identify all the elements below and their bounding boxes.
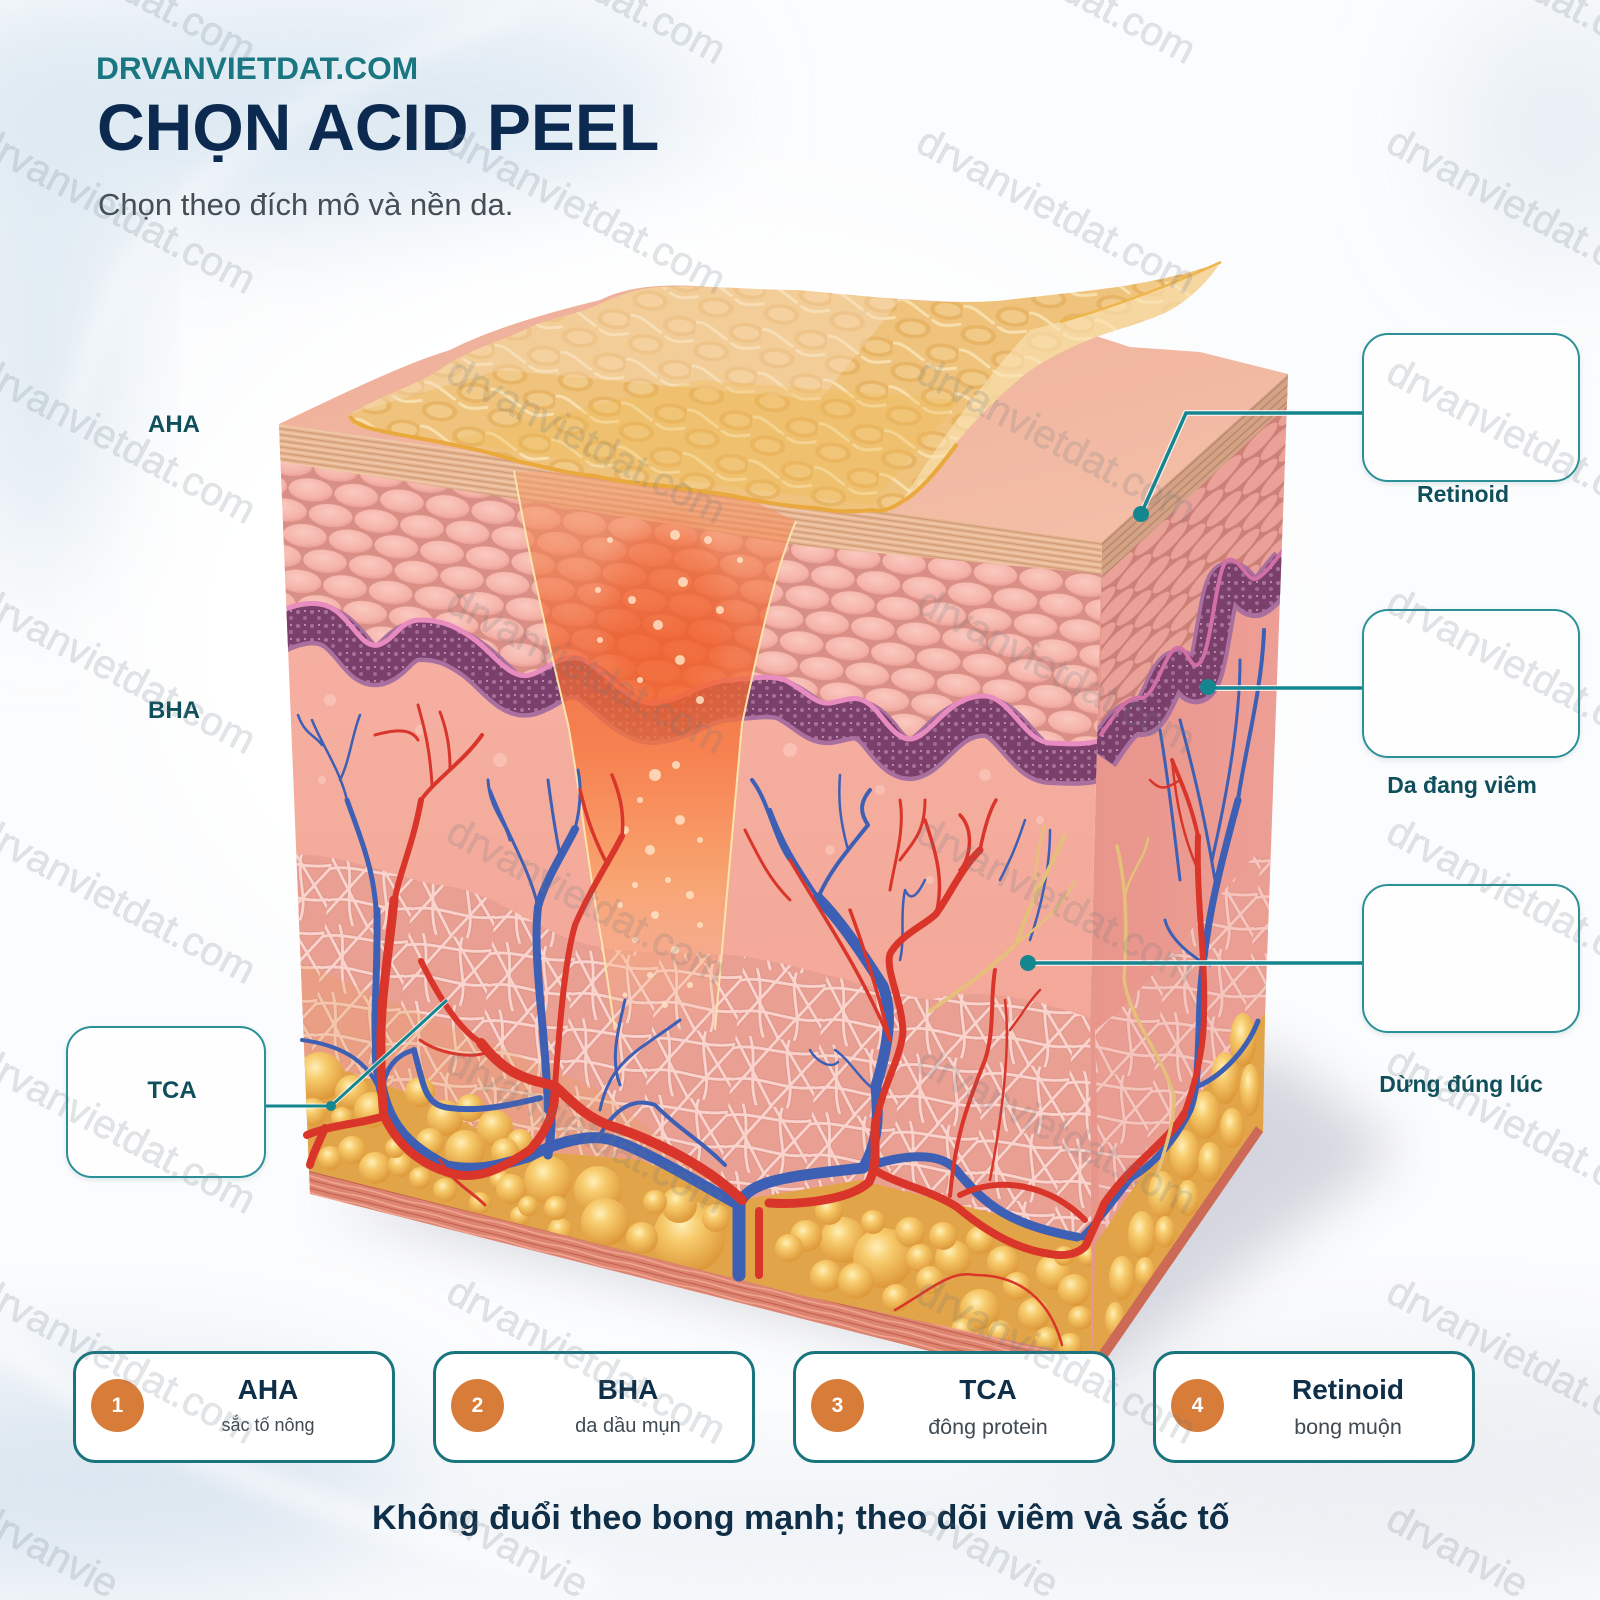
watermark grid: drvanvietdat.com	[910, 577, 1204, 763]
card 1 heading: AHA	[238, 1374, 298, 1405]
badge 3	[811, 1379, 864, 1432]
badge 4: 4	[1192, 1394, 1203, 1417]
watermark grid: drvanvietdat.com	[910, 1037, 1204, 1223]
stratum corneum band	[279, 424, 1102, 574]
leader: Retinoid	[1133, 413, 1362, 522]
peel sheet	[349, 262, 1221, 511]
label: Retinoid: Retinoid	[1417, 481, 1509, 507]
badge 3: 3	[832, 1394, 843, 1417]
muscle fascia band	[309, 1170, 1059, 1351]
label: Da dang viem: Da đang viêm	[1387, 772, 1537, 798]
subcutaneous fat layer	[296, 1052, 1098, 1360]
watermark grid: drvanvietdat.com	[440, 1037, 734, 1223]
watermark grid: drvanvietdat.com	[910, 117, 1204, 303]
brand line: DRVANVIETDAT.COM	[96, 50, 418, 86]
callout box: Retinoid	[1362, 333, 1580, 482]
callout box: Dung dung luc	[1362, 884, 1580, 1033]
acid penetration cone	[514, 471, 796, 1030]
callout box: TCA	[66, 1026, 266, 1178]
cast shadow under block	[320, 1050, 1400, 1385]
fibrous collagen mesh	[285, 854, 1096, 1260]
label: Dung dung luc: Dừng đúng lúc	[1379, 1071, 1543, 1097]
epidermis cell layer	[279, 440, 1102, 744]
label: BHA: BHA	[148, 697, 200, 724]
label: TCA: TCA	[147, 1077, 197, 1104]
badge 1	[91, 1379, 144, 1432]
basal purple wave	[279, 624, 1102, 765]
card 3 heading: TCA	[959, 1374, 1017, 1405]
card 3: TCA	[793, 1351, 1115, 1463]
card 4 note: bong muộn	[1294, 1415, 1402, 1439]
card 4 heading: Retinoid	[1292, 1374, 1404, 1405]
watermark grid: drvanvietdat.com	[440, 347, 734, 533]
card 4: Retinoid	[1153, 1351, 1475, 1463]
card 2 note: da dầu mụn	[575, 1415, 681, 1437]
watermark grid: drvanvietdat.com	[440, 1267, 734, 1453]
right side face of block	[1090, 374, 1288, 1357]
blood vessels	[298, 630, 1264, 1345]
top face of skin block	[279, 286, 1288, 542]
watermark grid: drvanvietdat.com	[910, 807, 1204, 993]
watermark grid: drvanvietdat.com	[440, 117, 734, 303]
card 2 heading: BHA	[598, 1374, 658, 1405]
subtitle: Chọn theo đích mô và nền da.	[98, 187, 513, 222]
card 1: AHA	[73, 1351, 395, 1463]
leader: Dung dung luc	[1020, 955, 1362, 971]
leader: TCA	[266, 1000, 447, 1111]
callout box: Da dang viem	[1362, 609, 1580, 758]
title: CHỌN ACID PEEL	[97, 90, 659, 164]
watermark grid: drvanvietdat.com	[440, 577, 734, 763]
dermis bumps	[318, 694, 1044, 884]
leader: Da dang viem	[1200, 679, 1362, 695]
card 3 note: đông protein	[928, 1415, 1048, 1439]
label: AHA: AHA	[148, 411, 200, 438]
veins	[298, 630, 1264, 1275]
front face of block	[270, 420, 1110, 1400]
badge 2	[451, 1379, 504, 1432]
badge 4	[1171, 1379, 1224, 1432]
arteries	[307, 705, 1204, 1345]
badge 1: 1	[112, 1394, 123, 1417]
card 1 note: sắc tố nông	[221, 1415, 315, 1435]
watermark grid: drvanvietdat.com	[440, 807, 734, 993]
skin cross-section illustration	[279, 260, 1398, 1388]
watermark grid: drvanvietdat.com	[910, 1267, 1204, 1453]
watermark grid: drvanvietdat.com	[910, 347, 1204, 533]
bottom takeaway: Không đuổi theo bong mạnh; theo dõi viêm và sắc tố	[372, 1499, 1230, 1537]
card 2: BHA	[433, 1351, 755, 1463]
nerves	[930, 825, 1174, 1175]
badge 2: 2	[472, 1394, 483, 1417]
